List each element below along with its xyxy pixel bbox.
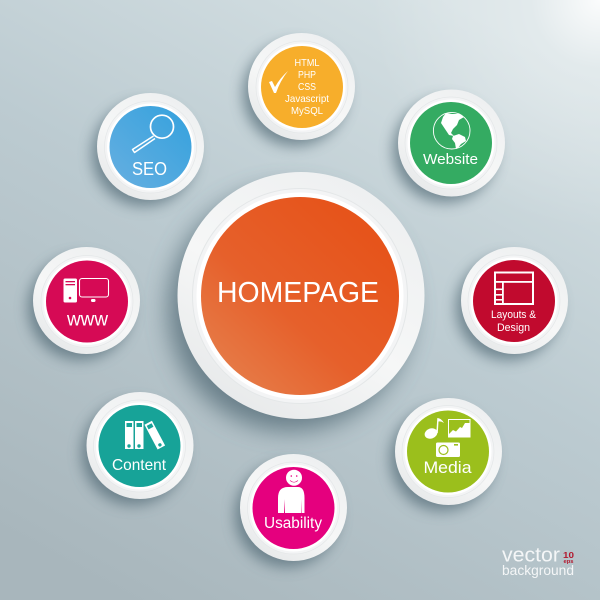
label: SEO: SEO xyxy=(132,159,167,179)
text: technology list: MySQL xyxy=(291,105,323,117)
icon: camera xyxy=(436,442,460,457)
central circle: homepage xyxy=(168,172,424,431)
panel: www (crimson) xyxy=(28,247,140,360)
label: Layouts & Design: Layouts & xyxy=(491,309,537,321)
icon: page layout xyxy=(495,272,533,304)
text: technology list: HTML xyxy=(294,57,320,69)
icon: magnifier xyxy=(132,115,174,152)
label: www: www xyxy=(66,310,108,330)
logo: vector background xyxy=(502,544,574,578)
text: technology list: Javascript xyxy=(285,93,329,105)
text: technology list: CSS xyxy=(298,81,316,93)
label: Content: Content xyxy=(112,457,167,474)
icon: picture xyxy=(448,420,470,437)
heading: HOMEPAGE: HOMEPAGE xyxy=(217,277,379,309)
text: technology list xyxy=(285,57,329,117)
icon: desktop computer xyxy=(64,278,108,302)
label: Website: Website xyxy=(423,151,478,168)
label: Usability: Usability xyxy=(264,515,322,532)
panel: SEO (blue) xyxy=(92,93,204,206)
panel: layouts and design (red) xyxy=(456,247,568,360)
icon: check mark xyxy=(269,71,288,93)
logo: vector background: background xyxy=(502,563,574,578)
text: technology list: PHP xyxy=(298,69,316,81)
panel: technologies (orange) xyxy=(243,33,355,146)
panel: website (green) xyxy=(393,90,505,202)
icon: globe xyxy=(433,112,470,149)
panel: media (lime) xyxy=(390,398,502,511)
panel: content (teal) xyxy=(82,392,194,505)
logo: vector background: 10 xyxy=(563,550,574,560)
icon: binders xyxy=(125,421,165,449)
label: Media: Media xyxy=(424,458,472,477)
label: Layouts & Design xyxy=(491,309,537,334)
logo: vector background: eps xyxy=(564,559,574,565)
panel: usability (magenta) xyxy=(235,454,347,567)
logo: vector background: vector xyxy=(502,544,560,566)
icon: smiling person xyxy=(278,470,304,513)
label: Layouts & Design: Design xyxy=(497,322,530,334)
icon: music note xyxy=(423,418,444,440)
